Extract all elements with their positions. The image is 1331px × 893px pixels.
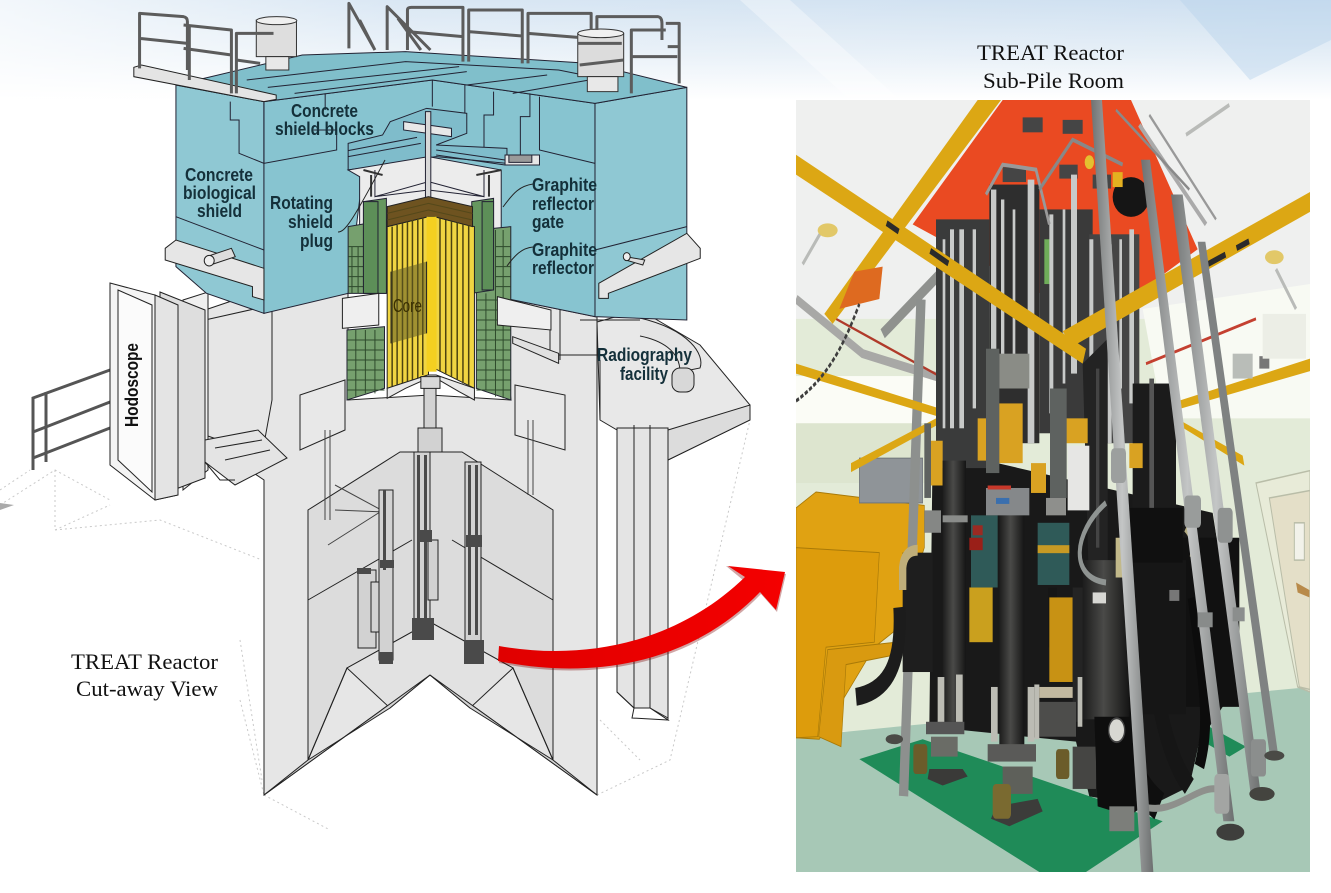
diagram label: Concrete shield blocks: shield blocks: [275, 119, 374, 139]
dark machinery mass behind columns: [929, 448, 1239, 806]
roof surface: [176, 52, 687, 103]
yellow control boxes: [928, 403, 1143, 493]
black actuator frames: [1083, 339, 1176, 597]
diagram label: Concrete biological shield: biological: [183, 183, 256, 203]
diagram label: Rotating shield plug: [270, 193, 333, 251]
back rods and tie rods: [899, 110, 1216, 796]
inner shield faces: [264, 80, 595, 317]
left pipe: [204, 248, 235, 266]
green floor mat: [859, 739, 1163, 872]
hoses gray and copper fittings: [796, 304, 1216, 808]
black support columns: [943, 461, 1186, 747]
shield block outlines: [176, 62, 687, 250]
right ledge: [599, 233, 700, 298]
yellow cabinets: [796, 458, 924, 747]
hodoscope: [110, 283, 287, 500]
caption: TREAT Reactor Sub-Pile Room: TREAT Reactor: [977, 40, 1125, 65]
reactor core: [387, 197, 474, 400]
red ceiling plate: [913, 100, 1198, 324]
diagram label: Radiography facility: Radiography: [597, 345, 692, 365]
left ledge: [165, 240, 264, 300]
outer left shield face: [176, 85, 264, 313]
column collars and labels: [924, 486, 1179, 742]
beam clamps: [886, 220, 1250, 268]
rotating shield plug: [348, 108, 539, 233]
leader lines: [338, 160, 533, 266]
caption: TREAT Reactor Cut-away View: Cut-away View: [76, 676, 218, 701]
diagram label: Graphite reflector gate: Graphite: [532, 175, 597, 195]
diagram label: Concrete biological shield: [183, 165, 256, 221]
graphite reflector gates: [363, 198, 386, 293]
column bases: [913, 717, 1143, 831]
teal motors: [969, 515, 1069, 587]
ceiling lights: [818, 223, 1284, 264]
diagram label: Graphite reflector: Graphite: [532, 240, 597, 260]
concrete base and pit: [205, 290, 597, 795]
black hoses and lower drums: [856, 538, 1239, 806]
white band openings: [342, 293, 559, 363]
diagram label: Radiography facility: facility: [620, 364, 668, 384]
diagram label: Graphite reflector: [532, 240, 597, 278]
ceiling: [796, 100, 1310, 334]
conduit and cable tray: [796, 105, 1296, 379]
diagram label: Concrete biological shield: Concrete: [185, 165, 253, 185]
cut-away diagram: [0, 3, 750, 830]
upper diagram (roof, shield, core): [134, 3, 700, 400]
diagram label: Core: Core: [393, 296, 422, 316]
diagram label: Concrete shield blocks: [275, 101, 374, 139]
wall equipment: [1233, 314, 1306, 379]
caption: TREAT Reactor Cut-away View: [71, 649, 219, 701]
slide background gradient: [0, 0, 1331, 100]
caption: TREAT Reactor Cut-away View: TREAT Reactor: [71, 649, 219, 674]
diagram label: Rotating shield plug: shield: [288, 212, 333, 232]
diagram label: Concrete biological shield: shield: [197, 201, 242, 221]
red arrow from cut-away to photo: [498, 566, 786, 671]
railings: [140, 3, 679, 93]
vent right: [578, 29, 624, 92]
gray unit: [1068, 446, 1089, 510]
outer right shield face: [595, 87, 687, 320]
radiography facility structure: [550, 300, 750, 720]
diagram label: Radiography facility: [597, 345, 692, 384]
roof edge slab: [134, 65, 276, 102]
caption: TREAT Reactor Sub-Pile Room: Sub-Pile Room: [983, 68, 1124, 93]
diagram label: Rotating shield plug: plug: [300, 231, 333, 251]
drive mechanisms in pit: [357, 388, 484, 664]
photo: sub-pile room: [796, 100, 1310, 872]
diagram label: Graphite reflector gate: [532, 175, 597, 232]
plate bolts: [1003, 117, 1149, 217]
hodoscope label: Hodoscope: [122, 343, 142, 427]
vent left: [256, 17, 297, 70]
diagram label: Graphite reflector gate: gate: [532, 212, 564, 232]
diagram label: Graphite reflector: reflector: [532, 258, 594, 278]
diagram label: Graphite reflector gate: reflector: [532, 194, 594, 214]
caption: TREAT Reactor Sub-Pile Room: [977, 40, 1125, 93]
right pipe: [623, 253, 645, 265]
walls: [796, 319, 1310, 732]
diagram label: Concrete shield blocks: Concrete: [291, 101, 358, 121]
door: [1256, 471, 1310, 692]
floor: [796, 687, 1310, 872]
ground dotted outlines: [0, 420, 750, 830]
left railing: [33, 370, 110, 470]
galvanized conduit pipes: [886, 100, 1284, 872]
diagram label: Rotating shield plug: Rotating: [270, 193, 333, 213]
graphite reflector lower and upper: [347, 198, 511, 400]
yellow ceiling beams: [796, 100, 1310, 472]
